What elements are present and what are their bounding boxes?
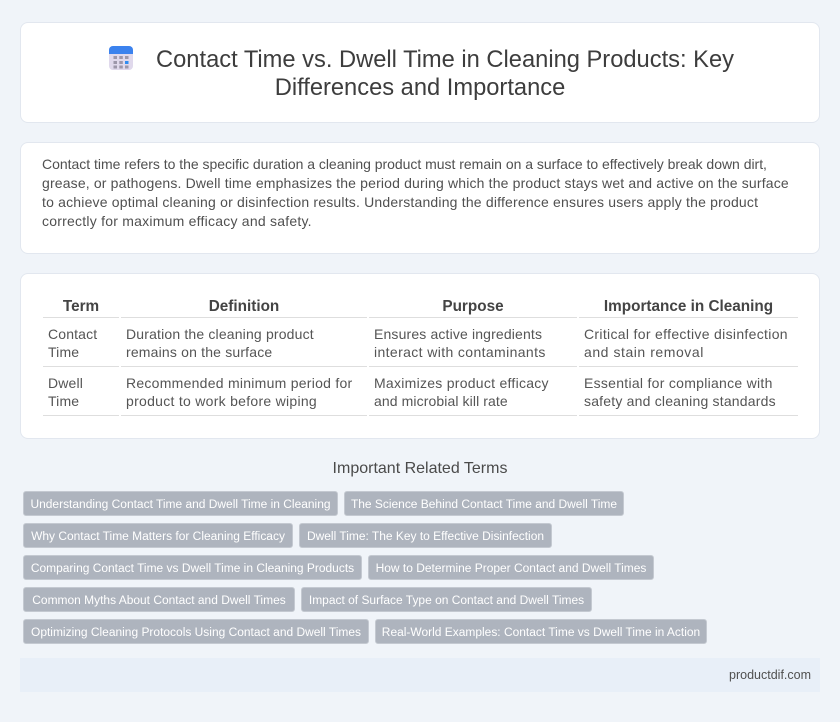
tag: Why Contact Time Matters for Cleaning Efficacy	[31, 529, 285, 543]
tag	[23, 523, 293, 548]
tag: Impact of Surface Type on Contact and Dwell Times	[309, 593, 584, 607]
tag: How to Determine Proper Contact and Dwell Times	[376, 561, 646, 575]
text block: introduction: Contact time refers to the specific duration a cleaning product must remain on a surface to effectively break down dirt,	[42, 156, 767, 172]
title	[156, 47, 734, 101]
tag	[344, 491, 624, 516]
table row: dwell time: and microbial kill rate	[374, 393, 508, 409]
tag: Understanding Contact Time and Dwell Time in Cleaning	[30, 497, 331, 511]
table header: Importance in Cleaning	[604, 298, 773, 315]
tag: Optimizing Cleaning Protocols Using Contact and Dwell Times	[31, 625, 361, 639]
table row: dwell time: safety and cleaning standards	[584, 393, 776, 409]
text block: introduction: correctly for maximum efficacy and safety.	[42, 213, 312, 229]
panel: header	[20, 22, 820, 123]
table row: contact time: remains on the surface	[126, 344, 272, 360]
panel: introduction	[20, 142, 820, 254]
tag: Real-World Examples: Contact Time vs Dwell Time in Action	[382, 625, 700, 639]
heading: related terms: Important Related Terms	[333, 460, 507, 477]
table row: contact time: Critical for effective disinfection	[584, 326, 788, 342]
title: Contact Time vs. Dwell Time in Cleaning Products: Key	[156, 47, 734, 73]
title: Differences and Importance	[275, 75, 565, 101]
tag	[23, 619, 369, 644]
tag: Comparing Contact Time vs Dwell Time in Cleaning Products	[31, 561, 354, 575]
tag: Common Myths About Contact and Dwell Times	[32, 593, 286, 607]
tag	[23, 555, 362, 580]
tag	[23, 587, 295, 612]
table row: contact time: Duration the cleaning product	[126, 326, 314, 342]
table header: Term	[63, 298, 99, 315]
footer source text: productdif.com	[729, 668, 811, 682]
icon: calendar	[109, 46, 133, 70]
tag	[368, 555, 654, 580]
tag: Dwell Time: The Key to Effective Disinfection	[307, 529, 544, 543]
tag	[299, 523, 552, 548]
tag	[375, 619, 707, 644]
table row: contact time: Time	[48, 344, 79, 360]
table row: contact time: interact with contaminants	[374, 344, 546, 360]
table row: contact time: and stain removal	[584, 344, 704, 360]
text block: introduction: grease, or pathogens. Dwell time emphasizes the period during which the product stays wet and active on the surface	[42, 175, 789, 191]
text block: introduction: to achieve optimal cleaning or disinfection results. Understanding the difference ensures users apply the product	[42, 194, 758, 210]
footer	[20, 658, 820, 692]
table header	[63, 298, 773, 315]
tag	[23, 491, 338, 516]
table row: contact time	[48, 326, 788, 360]
table header: Definition	[209, 298, 279, 315]
text block: introduction	[42, 156, 789, 229]
table row: dwell time: product to work before wiping	[126, 393, 317, 409]
table header: Purpose	[442, 298, 504, 315]
table row: dwell time	[48, 375, 776, 409]
table row: dwell time: Recommended minimum period for	[126, 375, 352, 391]
table row: dwell time: Maximizes product efficacy	[374, 375, 549, 391]
table row: dwell time: Time	[48, 393, 79, 409]
table row: contact time: Contact	[48, 326, 97, 342]
tag	[301, 587, 592, 612]
table row: dwell time: Dwell	[48, 375, 83, 391]
panel: comparison table	[20, 273, 820, 439]
tag: The Science Behind Contact Time and Dwell Time	[351, 497, 617, 511]
table row: dwell time: Essential for compliance with	[584, 375, 773, 391]
panel: related term tags	[23, 491, 707, 644]
table row: contact time: Ensures active ingredients	[374, 326, 542, 342]
